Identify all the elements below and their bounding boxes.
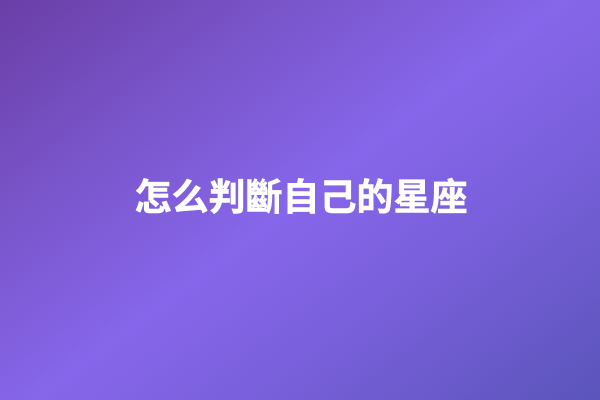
title: 怎么判斷自己的星座 (134, 177, 468, 218)
